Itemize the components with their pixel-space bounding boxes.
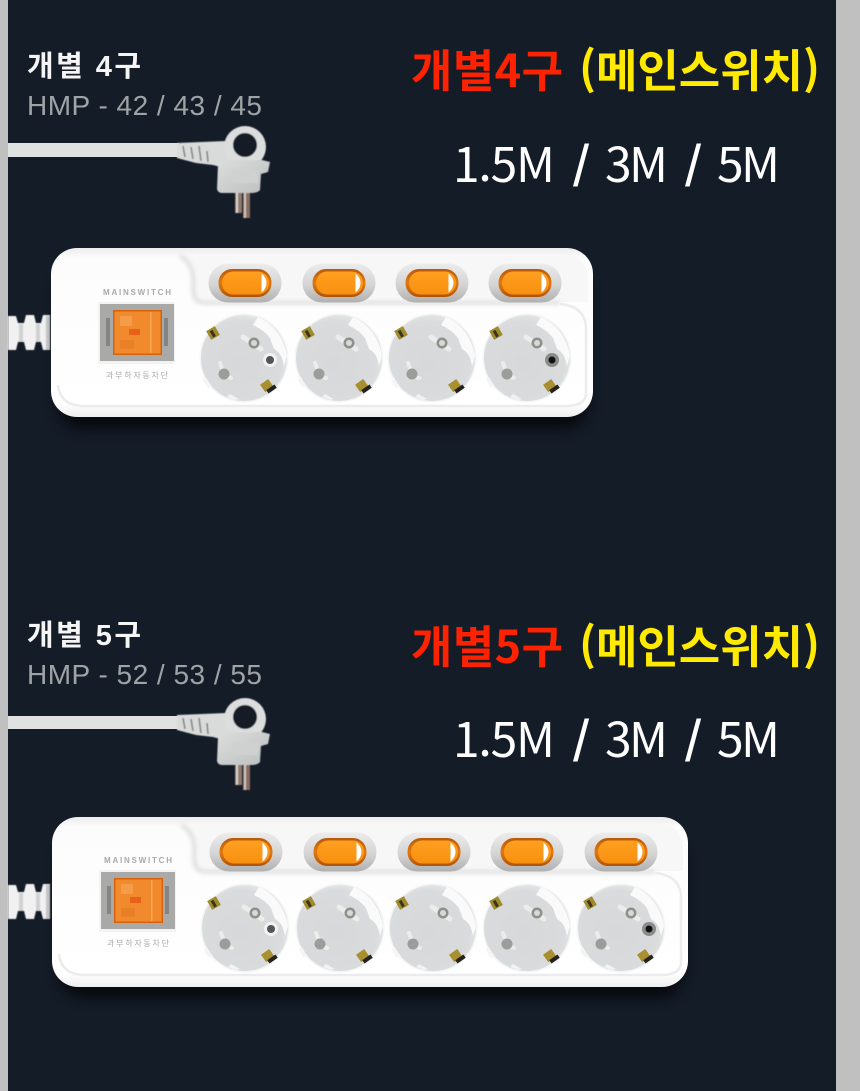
- cable lengths: [453, 126, 780, 199]
- power cord grip: [8, 315, 50, 350]
- rocker 2: [304, 832, 376, 872]
- power cord grip: [8, 884, 50, 919]
- cable lengths: 1.5M: [453, 126, 555, 196]
- indicator: dark: [642, 922, 656, 936]
- socket 1: [200, 314, 288, 402]
- socket 1: [200, 884, 290, 972]
- heading: gang count: 개별5구: [411, 611, 563, 676]
- cable lengths: 1.5M: [453, 701, 555, 771]
- cable: [8, 716, 179, 729]
- main switch label: MAINSWITCH: [103, 288, 171, 297]
- indicator: white: [264, 922, 278, 936]
- rocker 4: [490, 832, 564, 872]
- heading: main switch: (메인스위치): [579, 35, 820, 100]
- cable lengths: 3M: [605, 701, 668, 771]
- cable lengths: /: [573, 134, 590, 199]
- overload label: 과부하자동차단: [106, 370, 169, 381]
- rocker 1: [210, 832, 282, 872]
- label: product name: 개별 4구: [27, 50, 141, 83]
- right gray margin: [836, 0, 860, 1091]
- label: model numbers: HMP - 52 / 53 / 55: [27, 659, 262, 690]
- power strip: 4-gang: [51, 248, 593, 428]
- cable lengths: 5M: [717, 701, 780, 771]
- indicator: white: [263, 353, 277, 367]
- rocker 2: [302, 264, 376, 302]
- rocker 3: [396, 264, 468, 302]
- section: 4-gang: [8, 35, 820, 428]
- cable lengths: /: [685, 134, 702, 199]
- main switch: [99, 870, 176, 932]
- cable lengths: [453, 701, 780, 774]
- socket 2: [296, 884, 384, 972]
- left gray margin: [0, 0, 8, 1091]
- label: model numbers: HMP - 42 / 43 / 45: [27, 90, 262, 121]
- rocker 3: [398, 832, 470, 872]
- main switch: [98, 302, 175, 364]
- cable: [8, 143, 179, 157]
- main switch label: MAINSWITCH: [104, 856, 172, 865]
- label: product name: 개별 5구: [27, 619, 141, 652]
- power strip: 5-gang: [52, 817, 688, 997]
- rocker 1: [208, 264, 282, 302]
- icon: plug: [177, 698, 270, 790]
- heading: gang count: 개별4구: [411, 35, 563, 100]
- socket 4: [482, 884, 572, 972]
- socket 2: [294, 314, 384, 402]
- cable lengths: /: [573, 709, 590, 774]
- socket 3: [388, 314, 476, 402]
- rocker 4: [488, 264, 562, 302]
- socket 4: [482, 314, 572, 402]
- section: 5-gang: [8, 611, 820, 997]
- socket 5: [576, 884, 666, 972]
- rocker 5: [584, 832, 658, 872]
- cable lengths: 3M: [605, 126, 668, 196]
- indicator: dark: [545, 353, 559, 367]
- cable lengths: 5M: [717, 126, 780, 196]
- socket 3: [388, 884, 478, 972]
- cable lengths: /: [685, 709, 702, 774]
- overload label: 과부하자동차단: [107, 938, 170, 949]
- heading: main switch: (메인스위치): [579, 611, 820, 676]
- icon: plug: [177, 126, 270, 218]
